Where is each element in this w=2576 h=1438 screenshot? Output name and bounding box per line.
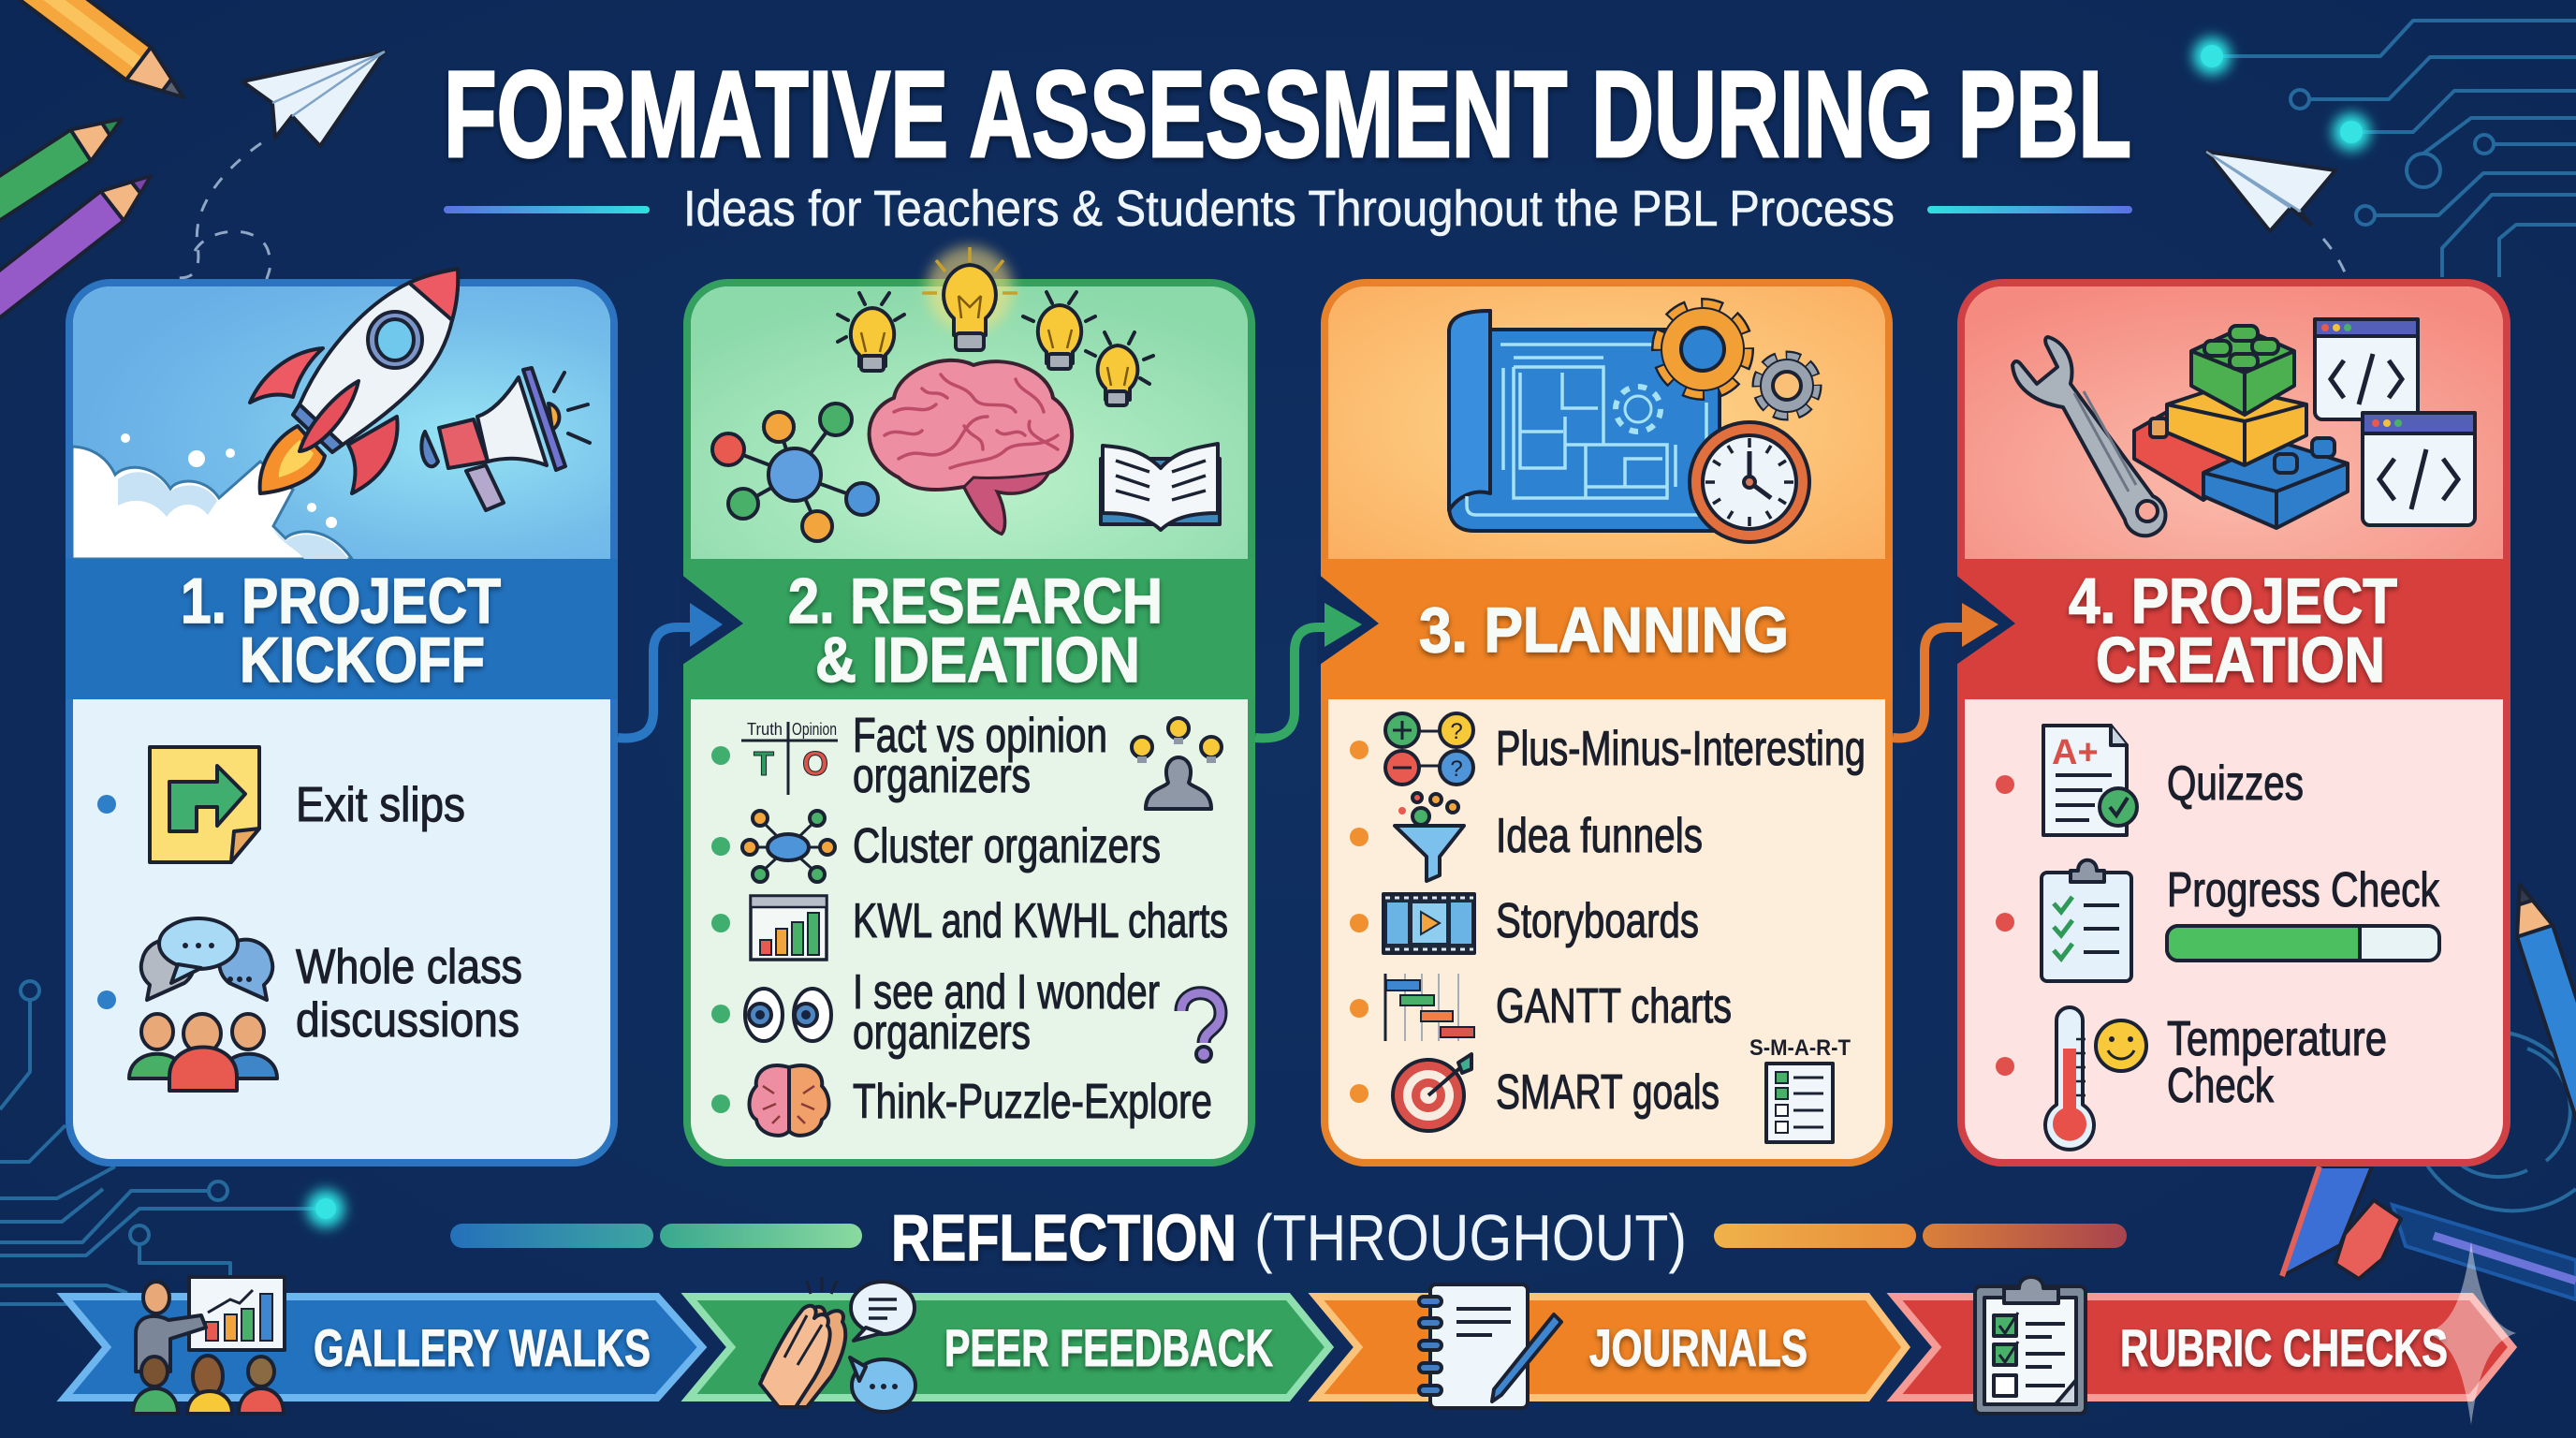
icon: notebook and pen xyxy=(1419,1284,1561,1408)
item: smart goals xyxy=(1350,1035,1851,1142)
ribbon: gallery walks xyxy=(65,1277,702,1414)
decorative pencil: green xyxy=(0,103,132,247)
item: storyboards xyxy=(1350,894,1699,953)
item: cluster organizers xyxy=(711,811,1161,882)
item: exit slips xyxy=(97,747,465,862)
arrow: kickoff to research xyxy=(618,603,723,738)
ribbon: peer feedback xyxy=(689,1277,1329,1412)
item: kwl charts xyxy=(711,894,1228,960)
item: quizzes: A+ xyxy=(2052,733,2099,772)
item: smart goals: SMART goals xyxy=(1496,1065,1720,1120)
reflection bars: left xyxy=(450,1224,862,1248)
item: whole class discussions xyxy=(97,918,522,1091)
header notch xyxy=(1954,573,2015,667)
item: fact vs opinion organizers xyxy=(711,709,1222,809)
item: plus-minus-interesting: ? xyxy=(1450,756,1463,782)
panel: 4. project creation: CREATION xyxy=(2096,624,2385,696)
item: i see and i wonder organizers: organizers xyxy=(853,1005,1031,1060)
ribbon: peer feedback: PEER FEEDBACK xyxy=(944,1318,1273,1377)
item: progress check: Progress Check xyxy=(2167,863,2440,917)
subtitle rule: right xyxy=(1927,206,2132,213)
item: storyboards: Storyboards xyxy=(1496,894,1699,948)
ribbon: rubric checks xyxy=(1895,1277,2512,1414)
panel: 2. research and ideation xyxy=(680,246,1255,1167)
item: fact vs opinion organizers: Truth xyxy=(747,720,783,739)
item: plus-minus-interesting xyxy=(1350,713,1866,785)
item: i see and i wonder organizers xyxy=(711,965,1221,1062)
reflection heading xyxy=(891,1201,1687,1274)
subtitle: Ideas for Teachers & Students Throughout the PBL Process xyxy=(683,181,1895,237)
item: think-puzzle-explore: Think-Puzzle-Explore xyxy=(853,1075,1212,1129)
panel: 2. research and ideation: & IDEATION xyxy=(815,624,1140,696)
arrow: research to planning xyxy=(1255,603,1362,738)
illustration: wrench, blocks, code windows xyxy=(2012,319,2475,536)
item: progress check xyxy=(1996,860,2440,981)
decorative pencil: orange xyxy=(0,0,196,114)
item: cluster organizers: Cluster organizers xyxy=(853,819,1161,873)
header notch xyxy=(680,573,743,667)
icon: presenter and audience xyxy=(133,1277,285,1414)
panel: 1. project kickoff xyxy=(66,269,618,1167)
item: whole class discussions: Whole class xyxy=(296,940,522,994)
reflection heading: (THROUGHOUT) xyxy=(1254,1201,1687,1274)
item: quizzes xyxy=(1996,726,2304,835)
illustration: blueprint, gears, clock xyxy=(1449,305,1816,542)
ribbon: journals xyxy=(1316,1284,1906,1408)
header notch xyxy=(1317,573,1379,667)
item: plus-minus-interesting: Plus-Minus-Interesting xyxy=(1496,722,1866,776)
ribbon: gallery walks: GALLERY WALKS xyxy=(314,1318,651,1377)
item: fact vs opinion organizers: Opinion xyxy=(792,720,837,739)
item: kwl charts: KWL and KWHL charts xyxy=(853,894,1228,948)
illustration: rocket launch xyxy=(72,269,590,559)
item: gantt charts xyxy=(1350,974,1732,1041)
circuit arcs: bottom right xyxy=(2424,1032,2576,1211)
item: smart goals: S-M-A-R-T xyxy=(1749,1035,1851,1061)
circuit traces: top right xyxy=(2193,21,2576,277)
illustration: brain, bulbs, network, book xyxy=(712,246,1220,541)
heading: 1. PROJECT xyxy=(181,565,501,637)
sparkle mark xyxy=(2426,1241,2516,1425)
panel: 3. planning xyxy=(1317,279,1893,1167)
reflection bars: right xyxy=(1714,1224,2127,1248)
item: fact vs opinion organizers: organizers xyxy=(853,749,1031,803)
subtitle rule: left xyxy=(444,206,650,213)
item: idea funnels xyxy=(1350,793,1703,881)
item: idea funnels: Idea funnels xyxy=(1496,809,1703,863)
panel: 4. project creation xyxy=(1954,279,2510,1167)
item: fact vs opinion organizers: Fact vs opinion xyxy=(853,709,1107,763)
panel: 1. project kickoff: KICKOFF xyxy=(240,624,485,696)
paper plane: top right xyxy=(2206,152,2348,279)
icon: clapping hands and speech bubbles xyxy=(760,1277,915,1412)
decorative big pencil and eraser at bottom right xyxy=(2282,1167,2576,1299)
item: whole class discussions: discussions xyxy=(296,993,520,1048)
item: gantt charts: GANTT charts xyxy=(1496,979,1732,1034)
item: fact vs opinion organizers: O xyxy=(802,744,828,783)
item: i see and i wonder organizers: I see and I wonder xyxy=(853,965,1160,1020)
item: plus-minus-interesting: ? xyxy=(1450,719,1463,744)
item: temperature check: Temperature xyxy=(2167,1012,2387,1066)
item: temperature check xyxy=(1996,1007,2387,1150)
arrow: planning to creation xyxy=(1893,603,1998,738)
decorative pencil: purple xyxy=(0,161,162,330)
icon: clipboard checklist xyxy=(1975,1277,2086,1414)
ribbon: journals: JOURNALS xyxy=(1589,1318,1808,1377)
item: exit slips: Exit slips xyxy=(296,778,465,832)
circuit traces: bottom left xyxy=(0,981,344,1304)
item: fact vs opinion organizers: T xyxy=(754,744,774,783)
decorative pencil: blue xyxy=(2502,879,2576,1122)
paper plane: top left xyxy=(172,51,385,279)
ribbon: rubric checks: RUBRIC CHECKS xyxy=(2120,1318,2448,1377)
item: think-puzzle-explore xyxy=(711,1065,1212,1136)
reflection heading: REFLECTION xyxy=(891,1201,1237,1274)
item: quizzes: Quizzes xyxy=(2167,756,2304,811)
item: temperature check: Check xyxy=(2167,1059,2275,1113)
heading: 4. PROJECT xyxy=(2069,565,2397,637)
heading: 2. RESEARCH xyxy=(788,565,1163,637)
heading: 3. PLANNING xyxy=(1419,594,1789,666)
